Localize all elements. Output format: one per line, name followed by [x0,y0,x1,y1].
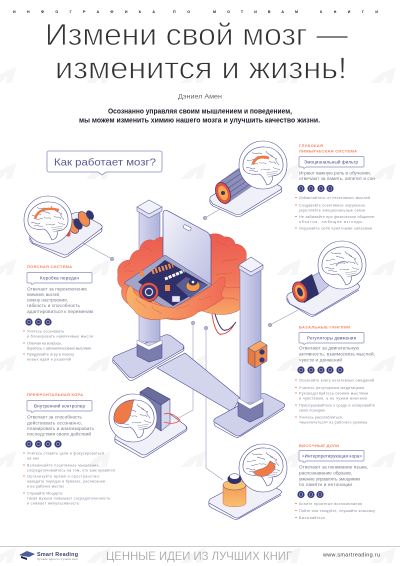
logo: Лучшие идеи из лучших книг [37,557,78,561]
icon: brain lens [109,394,157,442]
website: www.smartreading.ru [322,552,380,558]
lead text [79,109,320,125]
icon: brain lens [239,444,287,492]
tips: Вспоминайте позитивное мышление, [27,464,100,468]
tips: Осознайте книгу негативных ожиданий [299,378,374,382]
tips [295,196,375,230]
tips: Создавайте позитивное окружение, [299,204,366,208]
body text: смену настроения, [27,298,68,302]
tips: Учитесь осознавать [27,330,64,334]
icon: brain lens [239,141,287,189]
body text: Отвечают за понимание языка, [299,464,368,470]
icon: spring [152,265,173,272]
body text [299,170,375,181]
logo [19,551,78,561]
heading [299,143,357,154]
tips: Высыпайтесь [299,516,325,520]
tips: Организуйте время и пространство: [27,474,100,478]
body text: активность, взаимосвязь мыслей, [299,350,375,356]
electronics board [124,255,212,310]
module: temporal knob [209,444,287,519]
body text: внимания, мыслей, [27,291,60,297]
tag: Коробка передач [40,276,80,280]
tips: новых идей и решений [27,358,71,362]
tips: Слушайте Моцарта: [27,492,63,496]
machine: right pillar [238,257,263,422]
body text: умение управлять эмоциями [299,476,360,482]
tips [23,452,115,506]
tag: Эмоциональный фильтр [304,158,358,164]
machine: beam [157,353,240,412]
tips: боритесь с автоматическими мыслями [27,346,91,350]
heading: ГЛУБОКАЯ [299,143,323,148]
icon: knob [223,474,246,507]
kicker: МОТИВАМ [213,10,298,14]
icon: brain lens [24,196,72,244]
footer [0,546,400,563]
tips: и чувствами, а не чужим мнением [299,396,368,400]
panel: basal ganglia [295,324,375,424]
tips: и блокировать навязчивые мысли [27,334,93,338]
lead text: мы можем изменить химию нашего мозга и улучшить качество жизни. [79,118,320,125]
callout: question: Как работает мозг? [54,156,156,168]
body text: последствия своих действий [27,430,91,436]
body text: Отвечают за двигательную [299,346,359,350]
icon: knob [186,278,200,292]
author: Дэниел Амен [178,94,223,100]
tips: Руководствуйтесь своими мыслями [299,392,368,396]
tips: Учитесь ставить цели и фокусироваться [27,452,104,456]
tips: Окружайте себя приятными запахами [299,226,372,230]
body text: чувств и движений [299,356,342,362]
icons [297,491,324,498]
tips: укрепляйте эмоциональные связи [299,208,365,212]
brain: back lobes [118,234,247,320]
body text: отвечают за память, аппетит и сон [299,176,375,181]
title: изменится и жизнь! [55,50,347,86]
tips: такая музыка повышает сосредоточенность [27,496,110,500]
tips [23,330,93,362]
icon: radiator [140,387,180,431]
title: Измени свой мозг — [45,17,348,52]
control box [248,341,267,368]
tips: Пойте или танцуйте, слушайте классику [299,509,375,513]
kicker: КНИГИ [320,10,378,14]
tips: на них [27,456,39,460]
kicker: ПО [173,10,190,14]
icons [25,318,52,326]
tips: Не забывайте про физическое общение: [299,215,375,219]
heading: ПОЯСНАЯ СИСТЕМА [27,264,72,269]
icons [297,366,344,374]
connector lines [83,209,298,480]
machine: left base [113,335,184,380]
tips: и снижает импульсивность [27,502,79,506]
tips: свою позицию [299,408,325,412]
tips: сосредоточивайтесь на том, что вам нравится [27,468,115,472]
module: limbic battery [210,141,287,216]
icon: cylinder [290,268,332,304]
lead text: Осознанно управляя своим мышлением и поведением, [108,109,292,116]
callout: question [47,151,162,175]
wires [212,314,236,334]
body text [299,346,375,362]
heading: ВИСОЧНЫЕ ДОЛИ [299,443,339,448]
tips: Избавляйтесь от негативных мыслей [299,196,370,200]
module: prefrontal radiator [109,387,187,457]
module: cingulate gears [24,196,102,257]
tag: Регуляторы движения [307,336,357,340]
tips [295,378,375,424]
tips: Копите приятные воспоминания [299,502,362,506]
brain: front lobes [126,277,225,320]
tag: Внутренний контролер [34,402,85,408]
kicker [13,10,378,14]
body text [27,286,93,314]
panel: temporal lobes [295,443,375,520]
icon: brain lens [318,241,366,289]
tips: наведите порядок в бумагах, расписании [27,480,105,484]
body text: гибкость и способность [27,303,81,308]
module: basal battery [287,241,366,316]
icon: gear [140,282,158,302]
tips: Придумайте игру в поиску [27,352,74,356]
icons [297,185,334,192]
tips [295,502,375,520]
icons [25,440,62,448]
body text: Играют важную роль в обучении, [299,170,371,176]
panel card [163,210,211,285]
tag: «Интерпретирующая кора» [302,454,362,458]
tips: Учитесь регулярным медитациям [299,386,365,390]
heading: БАЗАЛЬНЫЕ ГАНГЛИИ [299,324,350,330]
tips: и на рабочих местах [27,484,64,488]
connector dots [110,216,272,330]
body text: Отвечает за переключение [27,286,87,292]
panel: waist system [23,264,93,362]
body text [299,464,368,487]
body text: планировать и анализировать [27,426,95,431]
body text: Отвечает за способность [27,414,83,420]
body text [27,414,95,436]
slogan: ЦЕННЫЕ ИДЕИ ИЗ ЛУЧШИХ КНИГ [106,549,292,563]
title [45,17,348,86]
tips: «выключаться» из рабочего режима [299,420,367,424]
icon: gears [62,209,96,238]
kicker: ИНФОГРАФИКА [13,10,155,14]
machine: right base [214,394,285,437]
icon: cylinder [213,167,254,206]
icon: keys [165,271,184,279]
tips: объятия, любящие взгляды [299,220,362,224]
machine: left pillar [137,200,162,362]
panel: prefrontal cortex [23,392,115,506]
logo: Smart Reading [37,552,78,558]
tips: Прислушивайтесь к среде и оспаривайте [299,404,375,408]
tips: Учитесь расслабляться, [299,416,343,420]
body text: действовать осознанно, [27,420,82,426]
panel: deep limbic system [295,143,375,230]
body text: распознавание образов, [299,470,352,476]
body text: адаптироваться к переменам [27,309,93,314]
heading: ЛИМБИЧЕСКАЯ СИСТЕМА [299,148,357,154]
body text: по памяти и интонации [299,482,352,487]
heading: ПРЕФРОНТАЛЬНАЯ КОРА [27,392,83,397]
tips: Отвечая на вопросы, [27,342,62,346]
